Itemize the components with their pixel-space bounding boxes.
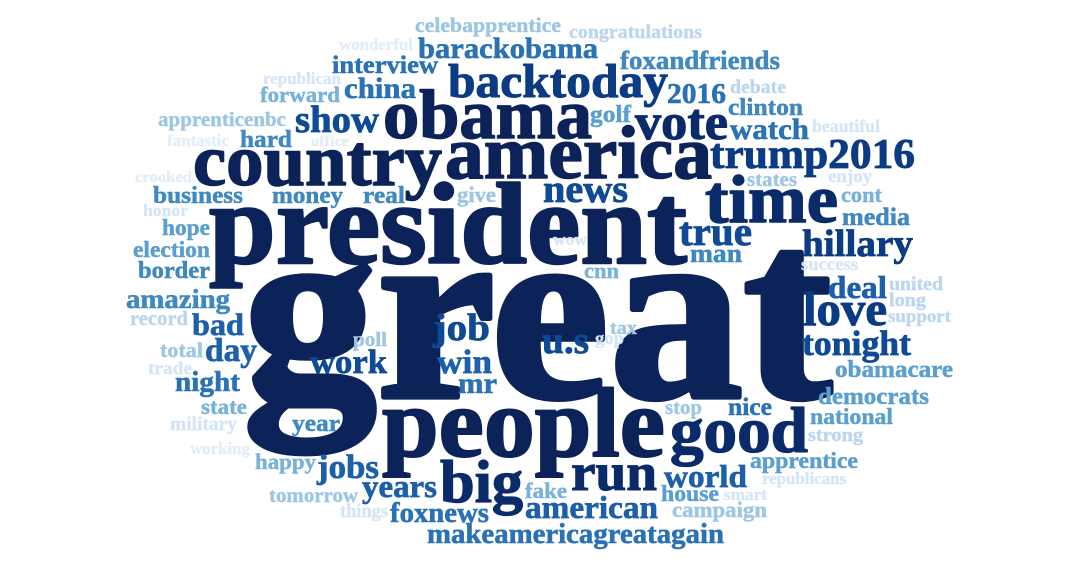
word: states: states [747, 169, 797, 191]
word: china: china [344, 71, 416, 105]
word: republicans: republicans [762, 469, 846, 488]
word: man: man [690, 238, 742, 268]
word: gop: gop [595, 328, 624, 348]
word: foxnews: foxnews [390, 498, 489, 529]
word: democrats: democrats [818, 383, 929, 410]
word: wow: wow [553, 230, 588, 249]
word: job: job [432, 307, 490, 349]
word: run: run [571, 442, 657, 502]
word: money: money [272, 182, 343, 209]
word: golf: golf [590, 101, 632, 128]
word: fake: fake [525, 478, 567, 503]
word: apprentice: apprentice [750, 448, 858, 474]
word: cont: cont [841, 183, 883, 207]
word: crooked: crooked [135, 169, 192, 186]
word: bad: bad [192, 307, 244, 342]
word: office: office [311, 133, 349, 150]
word: obama: obama [383, 77, 592, 154]
word: people: people [382, 369, 665, 478]
word: night: night [175, 367, 241, 398]
word: election: election [133, 237, 210, 262]
word: support: support [888, 306, 952, 326]
word: working: working [190, 439, 251, 458]
word: apprenticenbc: apprenticenbc [158, 109, 286, 131]
word: barackobama: barackobama [418, 33, 598, 65]
word: border: border [138, 258, 210, 284]
word: watch: watch [730, 112, 809, 146]
word: president: president [209, 161, 687, 289]
word: america: america [445, 112, 712, 195]
word: beautiful: beautiful [812, 116, 880, 136]
word: makeamericagreatagain: makeamericagreatagain [427, 519, 724, 550]
word: time: time [705, 162, 838, 237]
word: u.s: u.s [542, 320, 589, 362]
word: hard: hard [240, 126, 293, 153]
word: big: big [440, 449, 523, 516]
word: give: give [457, 182, 496, 207]
word: deal: deal [828, 269, 887, 305]
word: hillary: hillary [802, 223, 913, 265]
word: backtoday: backtoday [448, 55, 668, 108]
word: work: work [310, 344, 387, 381]
word: debate: debate [730, 77, 786, 98]
word: enjoy: enjoy [828, 166, 873, 186]
word: stop: stop [665, 397, 702, 419]
word: republican: republican [263, 69, 341, 88]
word: day: day [205, 333, 257, 369]
word: trump2016: trump2016 [710, 132, 915, 178]
word: nice: nice [728, 394, 772, 421]
word: jobs: jobs [316, 449, 379, 486]
word: win: win [437, 344, 492, 381]
word: congratulations: congratulations [569, 22, 702, 43]
word: year: year [292, 410, 340, 437]
word: trade: trade [148, 358, 192, 378]
word: tax: tax [610, 318, 637, 339]
word: true: true [679, 210, 752, 254]
word: obamacare: obamacare [835, 356, 953, 383]
word: media: media [842, 204, 910, 231]
word: tomorrow: tomorrow [269, 485, 358, 507]
word: military: military [170, 414, 238, 435]
word: forward: forward [260, 82, 341, 107]
word: amazing: amazing [126, 284, 230, 314]
word: mr: mr [458, 368, 497, 400]
word: fantastic: fantastic [167, 131, 229, 150]
word: years: years [362, 468, 437, 504]
word: good: good [670, 395, 808, 467]
word: hope: hope [162, 215, 210, 240]
word: things: things [340, 501, 388, 522]
word: american: american [525, 489, 658, 525]
word: 2016: 2016 [667, 79, 726, 110]
word: clinton: clinton [728, 94, 803, 121]
word: news: news [543, 168, 628, 211]
word: business: business [153, 182, 243, 209]
word: long: long [889, 290, 926, 311]
word: real: real [363, 182, 405, 209]
word: wonderful: wonderful [339, 35, 413, 54]
word: total: total [160, 338, 203, 362]
word: state: state [201, 394, 247, 419]
word: national: national [810, 404, 894, 430]
word: strong: strong [808, 425, 863, 446]
word: success: success [801, 254, 858, 274]
word: poll: poll [353, 329, 387, 351]
word: cnn: cnn [584, 259, 619, 283]
word: country: country [193, 120, 442, 201]
word: foxandfriends: foxandfriends [620, 46, 780, 75]
word: campaign: campaign [672, 497, 768, 522]
word: united: united [889, 274, 943, 295]
word: honor: honor [143, 201, 188, 220]
word: world: world [664, 458, 747, 494]
word: show: show [295, 99, 380, 141]
word: interview: interview [332, 50, 438, 79]
word: love: love [803, 284, 887, 336]
word: great: great [243, 168, 835, 457]
word: smart: smart [724, 485, 767, 504]
word: celebapprentice: celebapprentice [415, 13, 561, 37]
word: happy: happy [255, 449, 316, 474]
word: vote: vote [635, 94, 728, 150]
word: tonight: tonight [802, 324, 911, 363]
word: house: house [661, 481, 719, 507]
word: record: record [130, 308, 188, 330]
